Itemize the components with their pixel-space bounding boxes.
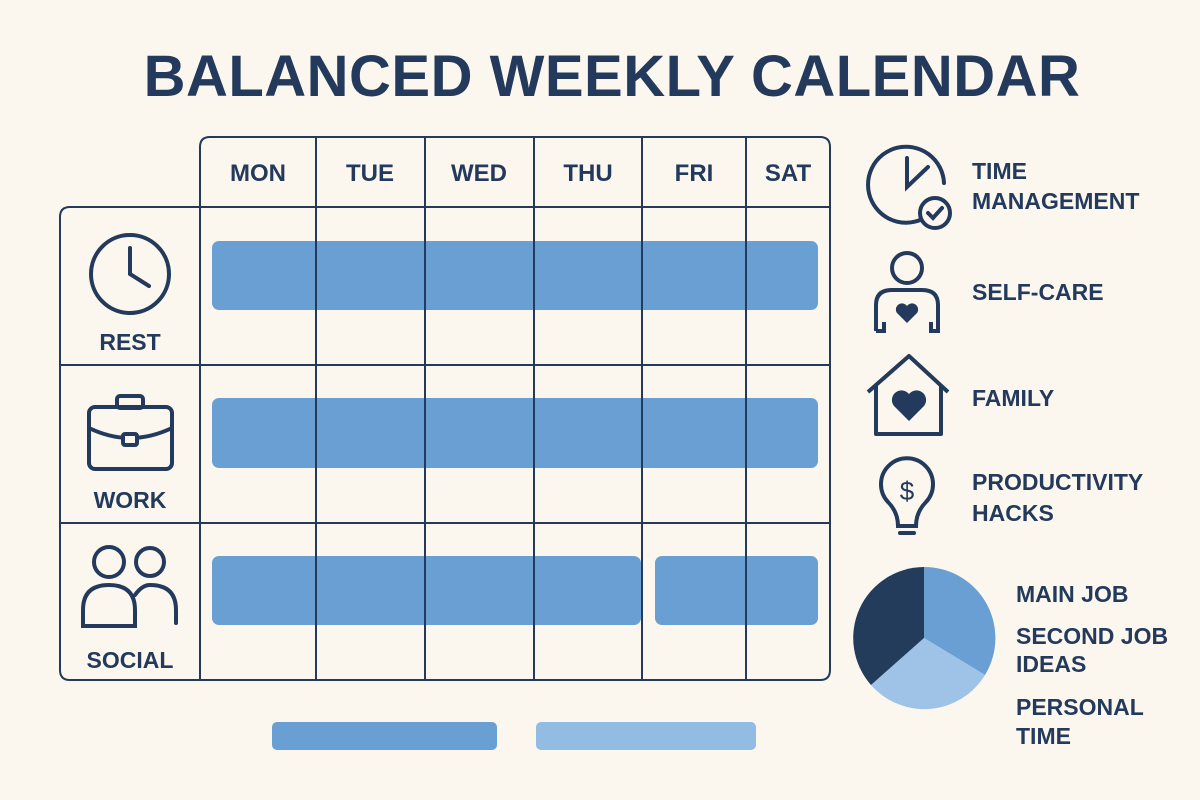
- row label: work: [89, 396, 172, 513]
- legend item: productivity hacks: PRODUCTIVITY: [972, 469, 1143, 495]
- legend item: family: [868, 356, 1054, 434]
- day headers: MON: [230, 160, 286, 187]
- pie legend: TIME: [1016, 723, 1071, 749]
- legend item: productivity hacks: $: [900, 476, 915, 506]
- pie legend: IDEAS: [1016, 651, 1086, 677]
- legend item: self-care: [876, 253, 1104, 331]
- bar: social weekdays: [212, 556, 641, 625]
- row label: rest: REST: [99, 329, 161, 355]
- legend item: time management: MANAGEMENT: [972, 188, 1139, 214]
- title: BALANCED WEEKLY CALENDAR: [144, 44, 1080, 109]
- legend item: time management: TIME: [972, 158, 1027, 184]
- icon: house with heart: [868, 356, 948, 434]
- bar: social weekend: [655, 556, 818, 625]
- day headers: SAT: [765, 160, 811, 187]
- day headers: FRI: [675, 160, 713, 187]
- pie legend: PERSONAL: [1016, 694, 1144, 720]
- icon: clock: [91, 235, 169, 313]
- day headers: TUE: [346, 160, 394, 187]
- icon: clock with check: [868, 147, 950, 228]
- day headers: THU: [563, 160, 613, 187]
- icon: light bulb with dollar: [881, 458, 933, 533]
- icon: people: [83, 547, 176, 626]
- bar: rest: [212, 241, 818, 310]
- icon: person with heart: [876, 253, 938, 331]
- pie legend: MAIN JOB: [1016, 581, 1128, 607]
- icon: briefcase: [89, 396, 172, 469]
- bottom bar: light: [536, 722, 756, 750]
- day headers: [230, 160, 811, 187]
- legend item: productivity hacks: HACKS: [972, 500, 1054, 526]
- day headers: WED: [451, 160, 507, 187]
- bar: work: [212, 398, 818, 468]
- pie chart: [853, 567, 995, 709]
- row label: work: WORK: [94, 487, 167, 513]
- legend item: time management: [868, 147, 1139, 228]
- legend item: productivity hacks: [881, 458, 1143, 533]
- calendar grid: [60, 137, 830, 680]
- legend item: family: FAMILY: [972, 385, 1054, 411]
- pie legend: SECOND JOB: [1016, 623, 1168, 649]
- bottom bar: dark: [272, 722, 497, 750]
- legend item: self-care: SELF-CARE: [972, 279, 1104, 305]
- row label: social: SOCIAL: [87, 647, 173, 673]
- row label: rest: [91, 235, 169, 355]
- row label: social: [83, 547, 176, 673]
- pie legend: [1016, 581, 1168, 749]
